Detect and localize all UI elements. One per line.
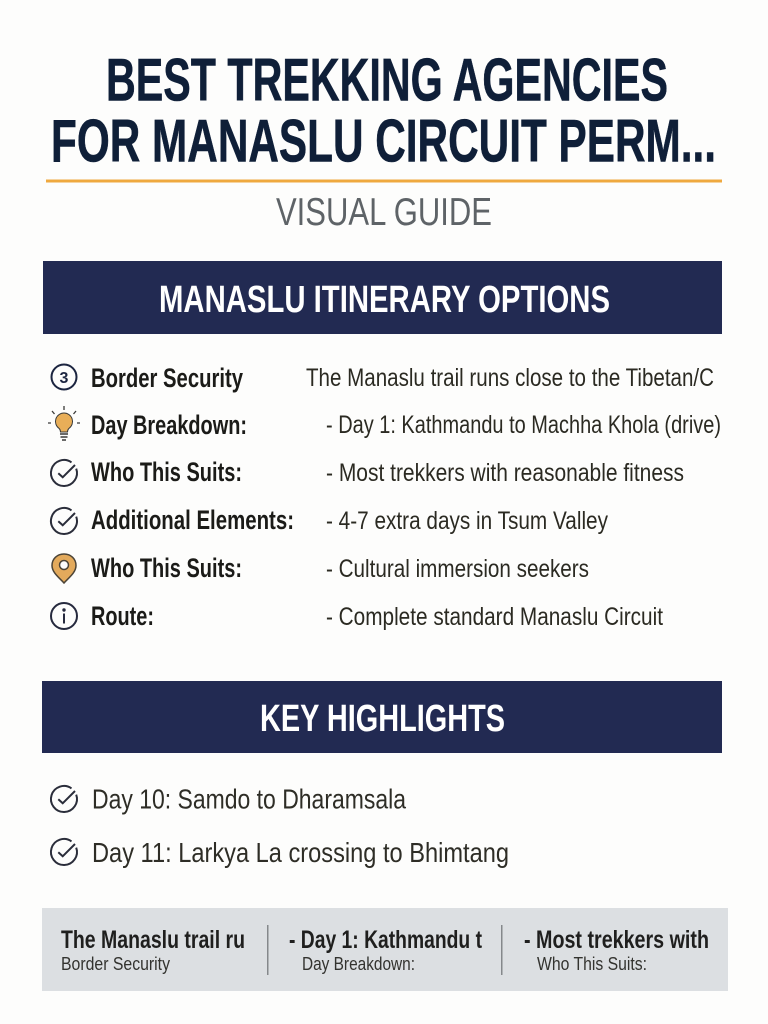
- icon: info circle: [51, 603, 77, 629]
- row text: who this suits: - Cultural immersion seekers: [326, 555, 589, 583]
- row text: who this suits: - Most trekkers with reasonable fitness: [326, 459, 684, 487]
- highlight: day 11: Day 11: Larkya La crossing to Bhimtang: [92, 837, 509, 868]
- icon: check circle: [51, 460, 77, 486]
- heading: key highlights: KEY HIGHLIGHTS: [260, 698, 505, 740]
- panel: summary strip: [42, 908, 728, 991]
- icon: map pin: [52, 554, 76, 583]
- icon: number three: 3: [60, 370, 69, 387]
- icon: check circle: [51, 508, 77, 534]
- row label: route: Route:: [91, 601, 154, 631]
- row label: additional elements: Additional Elements:: [91, 505, 294, 535]
- itinerary list: [48, 363, 721, 631]
- summary: border security: Border Security: [61, 954, 170, 974]
- summary: who this suits: - Most trekkers with: [524, 926, 709, 954]
- summary: day breakdown: Day Breakdown:: [302, 954, 415, 974]
- row label: who this suits: Who This Suits:: [91, 457, 242, 487]
- highlights list: [51, 784, 509, 868]
- icon: check circle: [51, 786, 77, 812]
- panel: itinerary options: [43, 261, 722, 334]
- summary: border security: [61, 926, 245, 974]
- title underline: [46, 180, 722, 182]
- row text: route: - Complete standard Manaslu Circuit: [326, 603, 663, 631]
- heading: itinerary options: MANASLU ITINERARY OPTIONS: [159, 279, 610, 321]
- summary: who this suits: Who This Suits:: [537, 954, 647, 974]
- panel: key highlights: [42, 681, 722, 753]
- summary: border security: The Manaslu trail ru: [61, 926, 245, 954]
- summary: day breakdown: - Day 1: Kathmandu t: [289, 926, 483, 954]
- subtitle: VISUAL GUIDE: [276, 191, 492, 234]
- title: [51, 46, 716, 174]
- icon: number three: [52, 364, 76, 390]
- highlight: day 10: Day 10: Samdo to Dharamsala: [92, 784, 406, 814]
- row label: border security: Border Security: [91, 363, 243, 393]
- icon: light bulb: [48, 406, 80, 440]
- row label: who this suits: Who This Suits:: [91, 553, 242, 583]
- row text: additional elements: - 4-7 extra days in Tsum Valley: [326, 507, 608, 535]
- summary: day breakdown: [289, 926, 483, 974]
- row label: day breakdown: Day Breakdown:: [91, 410, 247, 440]
- icon: check circle: [51, 839, 77, 865]
- summary: who this suits: [524, 926, 709, 974]
